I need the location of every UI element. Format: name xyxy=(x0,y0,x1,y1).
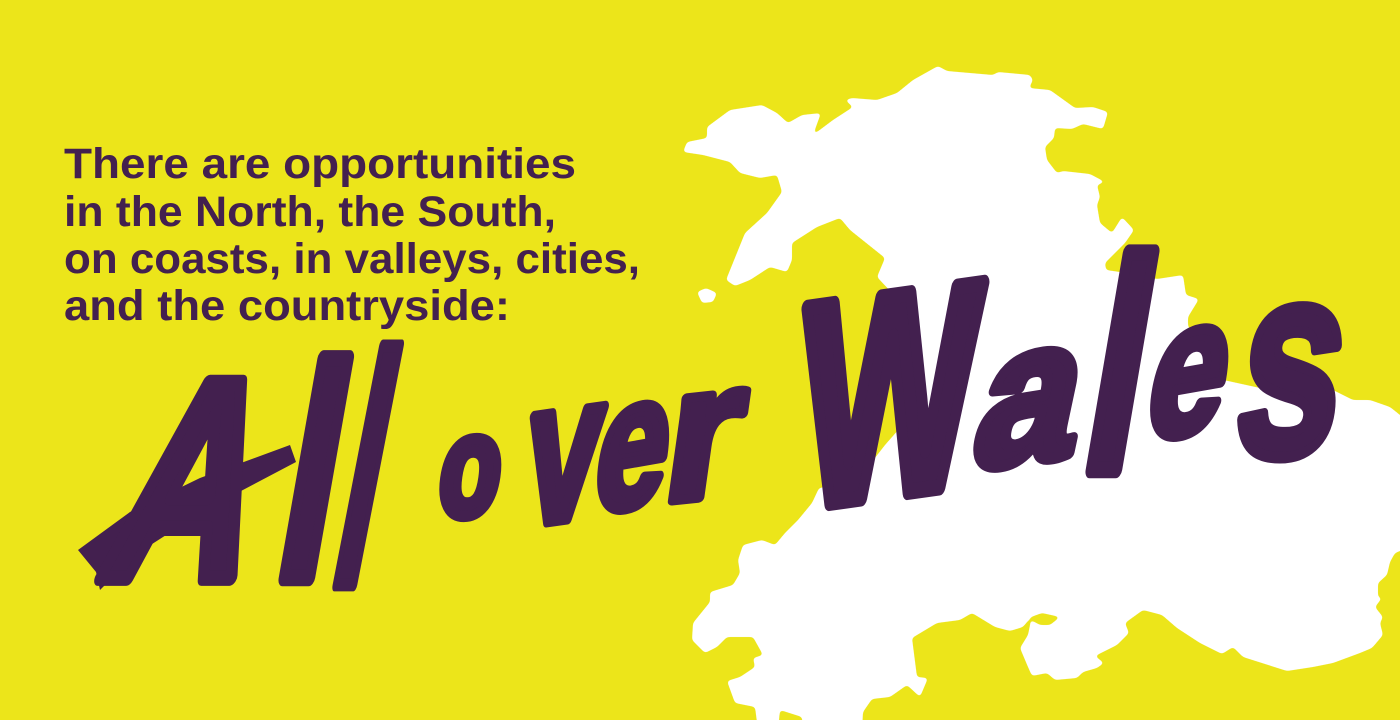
word: Wales: W xyxy=(793,220,988,569)
line 4: and the countryside: xyxy=(64,282,510,330)
map: mainland xyxy=(683,66,1400,720)
word: Wales xyxy=(793,198,1367,569)
word: Wales: l xyxy=(1067,198,1177,534)
word: Wales: e xyxy=(1134,252,1249,483)
word: All: A xyxy=(77,321,314,639)
word: over: o xyxy=(431,388,513,546)
word: over: e xyxy=(585,332,685,554)
A crossbar swash xyxy=(78,445,296,590)
line 3: on coasts, in valleys, cities, xyxy=(64,235,640,283)
word: All: l xyxy=(312,286,422,655)
word: Wales: s xyxy=(1221,206,1367,513)
word: All: l xyxy=(259,305,371,643)
word: over: v xyxy=(517,329,614,569)
word: over xyxy=(431,319,759,569)
map: small island xyxy=(697,288,717,303)
word: Wales: a xyxy=(959,272,1108,513)
brush heading: All over Wales xyxy=(77,198,1367,655)
line 1: There are opportunities xyxy=(64,140,576,188)
intro text xyxy=(64,140,640,330)
word: over: r xyxy=(653,319,759,544)
line 2: in the North, the South, xyxy=(64,188,556,236)
map of Wales xyxy=(683,66,1400,720)
word: All xyxy=(77,286,422,655)
